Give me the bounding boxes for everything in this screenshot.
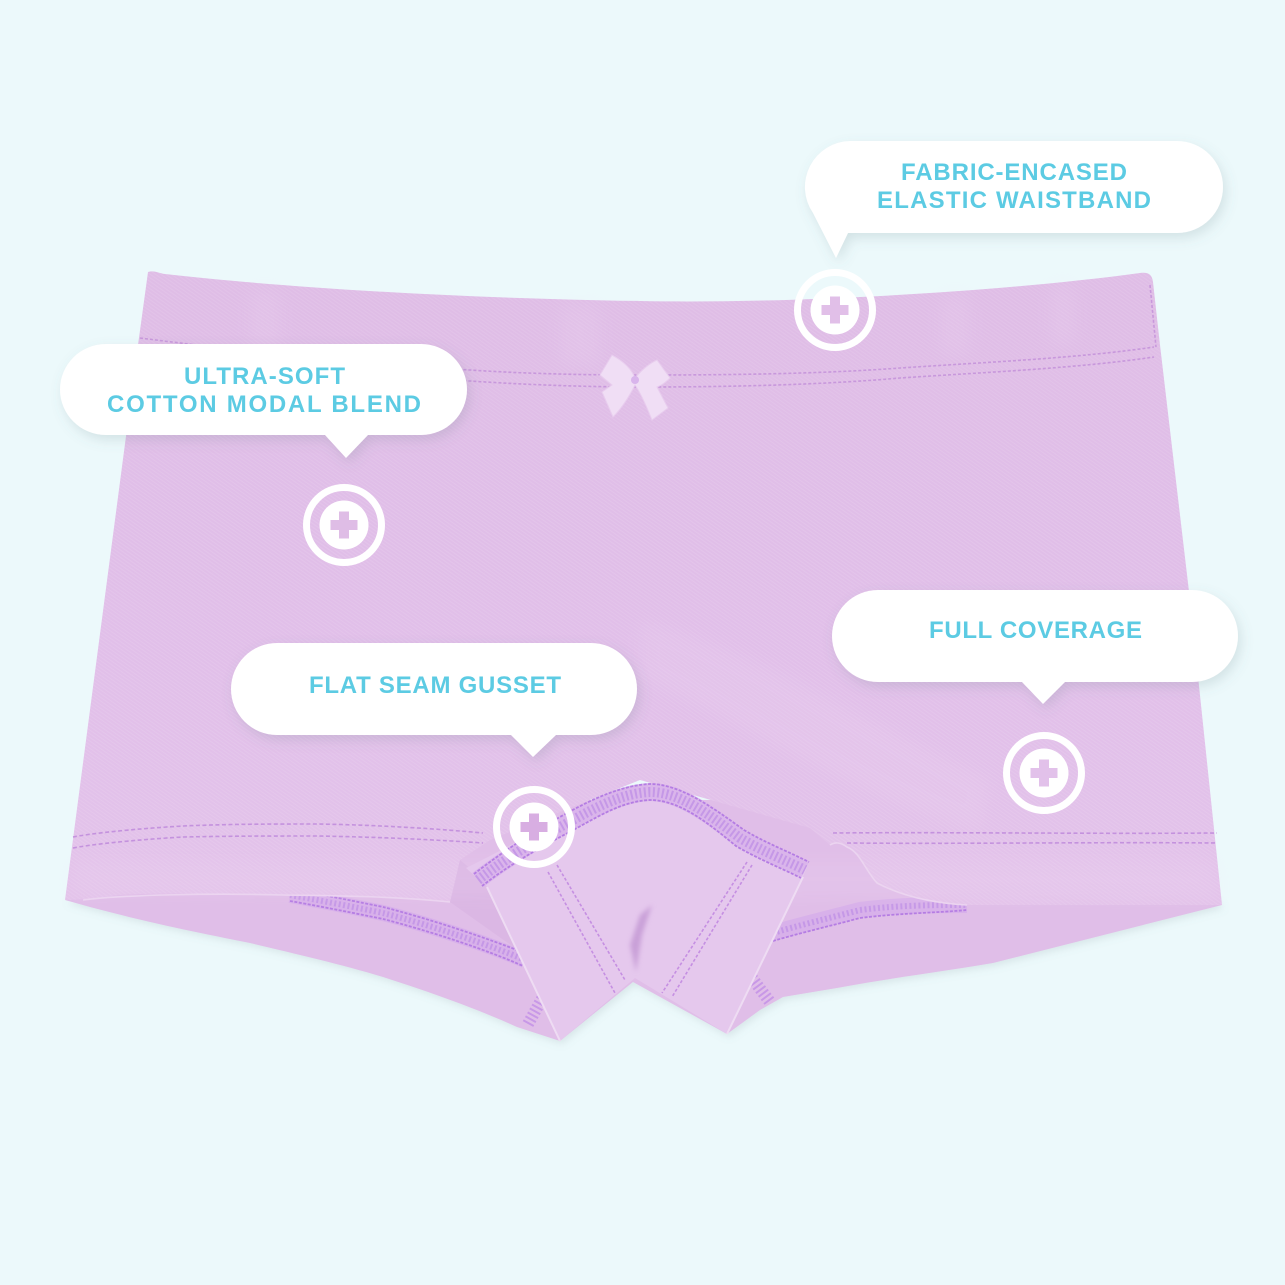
crotch seam ends xyxy=(528,978,770,1024)
garment back panel xyxy=(65,800,1222,1041)
label: waistband: FABRIC-ENCASED xyxy=(901,159,1127,186)
bow knot xyxy=(631,376,639,384)
bubble: gusset xyxy=(231,643,637,757)
callout: fabric-encased elastic waistband: ELASTIC WAISTBAND xyxy=(877,187,1151,214)
gusset fabric xyxy=(466,784,809,1041)
callout: ultra-soft cotton modal blend xyxy=(60,344,467,458)
callout: flat seam gusset xyxy=(231,643,637,757)
marker: gusset plus icon xyxy=(496,790,572,864)
callout: full coverage xyxy=(832,590,1238,704)
front panel knit texture xyxy=(65,271,1222,905)
bubble: waistband xyxy=(805,141,1223,258)
callout: ultra-soft cotton modal blend: COTTON MODAL BLEND xyxy=(107,391,421,418)
hem edge highlight xyxy=(83,843,967,905)
gusset vertical stitching xyxy=(548,862,752,997)
garment front panel xyxy=(65,271,1222,905)
label: gusset: FLAT SEAM GUSSET xyxy=(309,672,561,699)
gusset seam band xyxy=(474,784,809,886)
bubble: fabric xyxy=(60,344,467,458)
label: coverage: FULL COVERAGE xyxy=(929,617,1142,644)
waistband stitching xyxy=(140,285,1156,387)
bow xyxy=(600,355,670,420)
marker: coverage plus icon xyxy=(1006,736,1082,810)
garment: lilac boyshort underwear xyxy=(65,271,1222,1041)
gusset flap edge highlight xyxy=(487,877,803,1041)
leg hem stitching xyxy=(73,824,1217,848)
bow loops and tails xyxy=(600,355,670,420)
waistband fold shading xyxy=(70,285,1218,900)
gusset centre crease xyxy=(630,905,652,972)
callout: fabric-encased elastic waistband xyxy=(805,141,1223,258)
label: fabric: ULTRA-SOFT xyxy=(184,363,345,390)
right back seam xyxy=(773,905,967,941)
marker: waistband plus icon xyxy=(798,272,872,348)
bubble: coverage xyxy=(832,590,1238,704)
fold shadow beside gusset xyxy=(450,860,525,955)
left back seam xyxy=(290,889,527,966)
marker: fabric plus icon xyxy=(306,488,382,562)
gusset xyxy=(466,784,809,1041)
